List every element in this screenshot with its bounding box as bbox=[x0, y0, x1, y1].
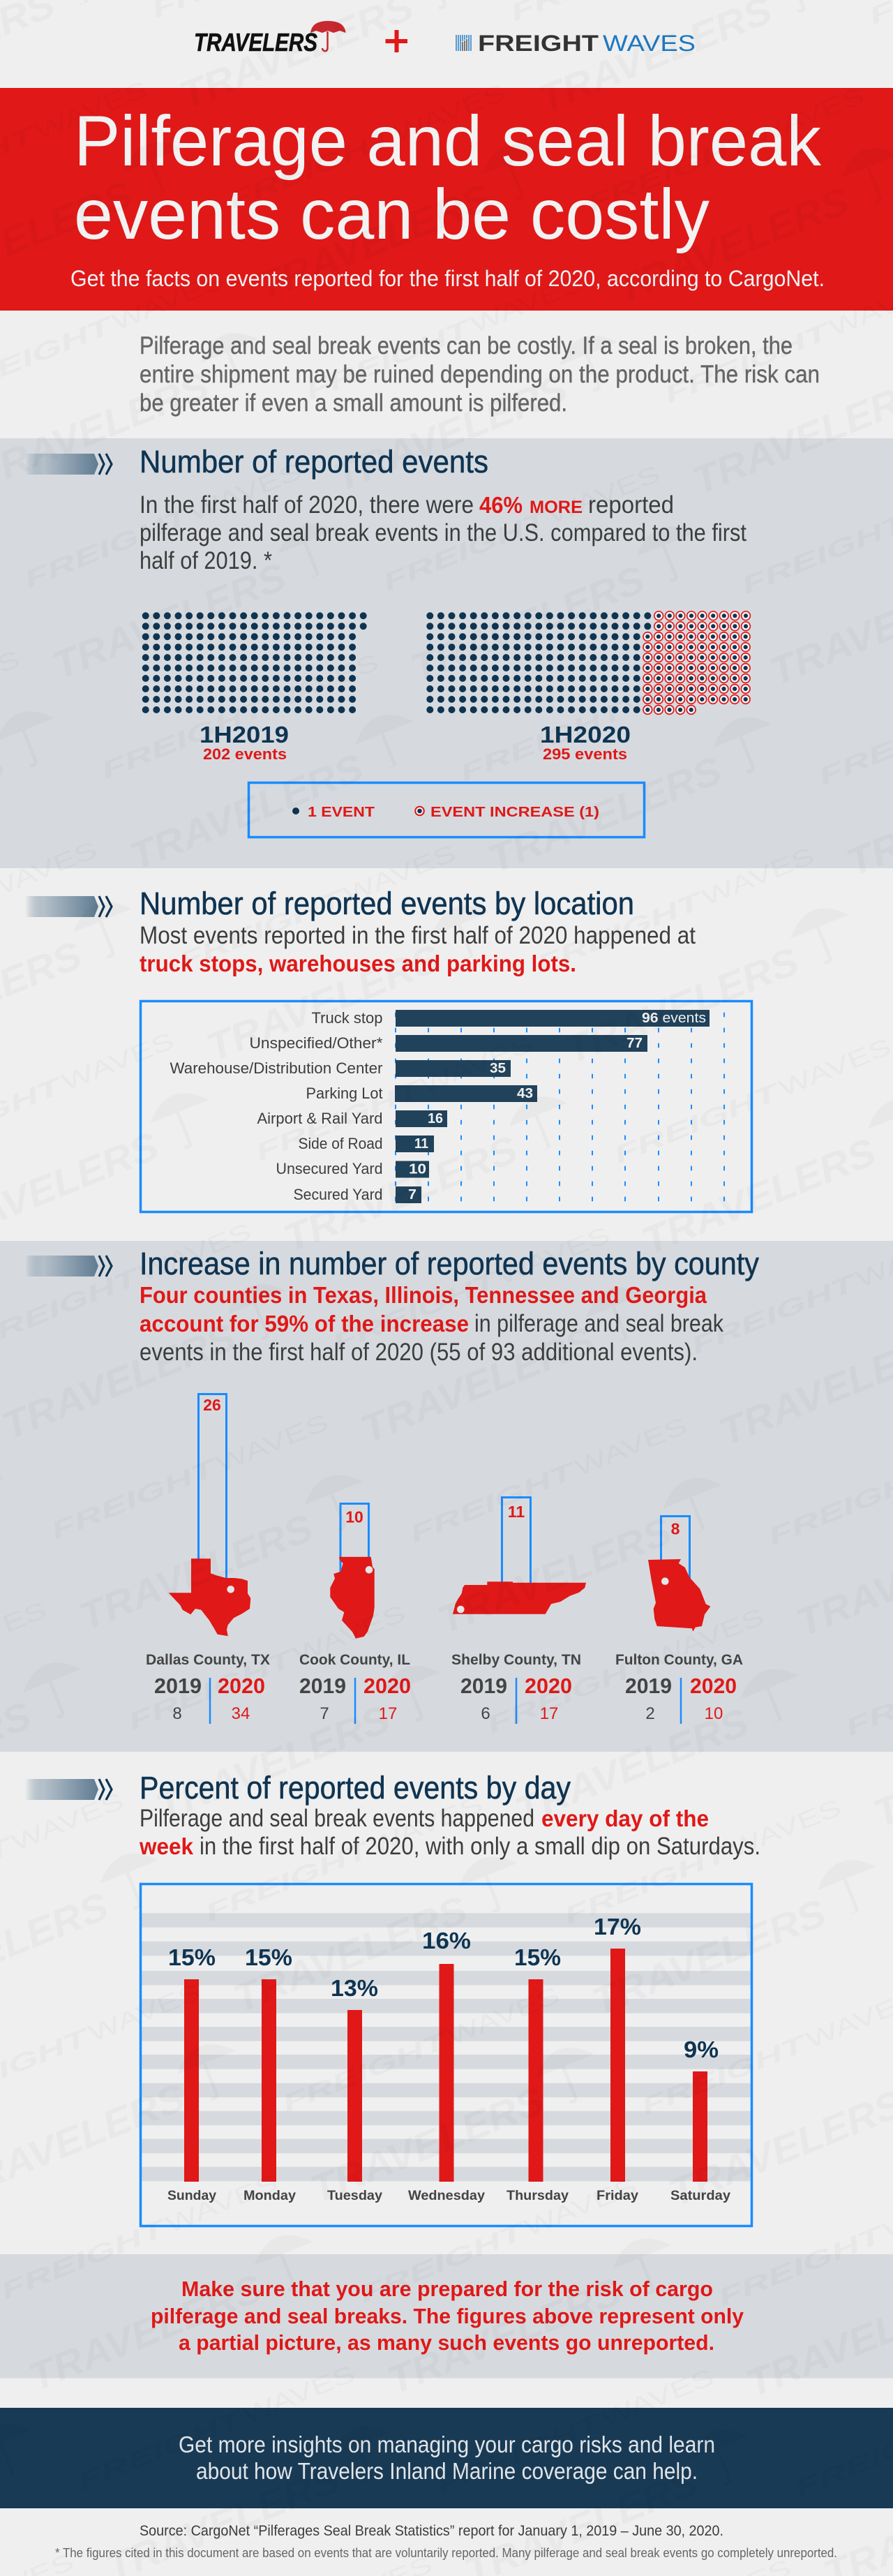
legend: 1 EVENT bbox=[308, 805, 375, 820]
county: Cook IL bbox=[299, 1503, 411, 1724]
bar: side of road: 11 bbox=[414, 1136, 428, 1152]
county: Shelby TN: 11 bbox=[508, 1503, 525, 1521]
county: Shelby TN: 17 bbox=[540, 1704, 558, 1723]
bar: truck stop: Truck stop bbox=[311, 1009, 382, 1027]
bar: Monday: Monday bbox=[243, 2189, 296, 2203]
body text: In the first half of 2020, there were bbox=[140, 491, 474, 519]
legend: EVENT INCREASE (1) bbox=[430, 805, 599, 820]
intro text: be greater if even a small amount is pilfered. bbox=[140, 389, 567, 417]
body text bbox=[140, 491, 746, 574]
county: Dallas TX: 26 bbox=[203, 1396, 221, 1414]
body text: in the first half of 2020, with only a small dip on Saturdays. bbox=[200, 1833, 760, 1860]
county: Fulton GA: Fulton County, GA bbox=[615, 1652, 743, 1668]
body text: pilferage and seal break events in the U.S. compared to the first bbox=[140, 519, 746, 546]
bar chart: location bbox=[141, 1001, 752, 1212]
body text: every day of the bbox=[541, 1806, 709, 1831]
bar: airport bbox=[257, 1110, 447, 1127]
bar: Friday bbox=[594, 1914, 641, 2203]
map: Texas bbox=[169, 1558, 250, 1636]
county: Dallas TX: 8 bbox=[172, 1704, 182, 1723]
title: events can be costly bbox=[74, 174, 710, 254]
bar: Thursday: 15% bbox=[514, 1944, 561, 1970]
bar: warehouse bbox=[170, 1059, 511, 1077]
county: Fulton GA: 2 bbox=[645, 1704, 655, 1723]
bar: Tuesday bbox=[327, 1975, 382, 2203]
bar: unspecified bbox=[250, 1034, 647, 1052]
callout: prepared for risk: Make sure that you are prepared for the risk of cargo bbox=[181, 2277, 713, 2301]
county: Shelby TN: 2019 bbox=[460, 1674, 507, 1698]
bar: side of road: Side of Road bbox=[299, 1135, 382, 1152]
plus sign bbox=[385, 30, 407, 52]
logo: FreightWaves: WAVES bbox=[603, 31, 696, 56]
county: Cook IL: 10 bbox=[345, 1507, 363, 1526]
bar: Sunday: Sunday bbox=[167, 2189, 216, 2203]
county: Fulton GA: 8 bbox=[671, 1520, 680, 1538]
body text: account for 59% of the increase bbox=[140, 1311, 469, 1337]
body text: Four counties in Texas, Illinois, Tennessee and Georgia bbox=[140, 1282, 707, 1308]
bar: Tuesday: 13% bbox=[331, 1975, 378, 2001]
panel: events by location bbox=[25, 886, 752, 1212]
body text: truck stops, warehouses and parking lots. bbox=[140, 951, 576, 976]
body text bbox=[140, 922, 696, 976]
county: Shelby TN bbox=[451, 1498, 586, 1724]
label: 1H2020: 1H2020 bbox=[540, 722, 631, 747]
map: Illinois bbox=[330, 1557, 375, 1639]
county: Cook IL: 17 bbox=[379, 1704, 397, 1723]
county: Fulton GA: 10 bbox=[705, 1704, 723, 1723]
bar: secured yard: Secured Yard bbox=[293, 1186, 382, 1203]
body text: Most events reported in the first half of 2020 happened at bbox=[140, 922, 696, 949]
bar: truck stop bbox=[311, 1009, 710, 1027]
body text: reported bbox=[588, 491, 674, 519]
title banner bbox=[0, 88, 893, 311]
county: Shelby TN: Shelby County, TN bbox=[451, 1652, 581, 1668]
callout: prepared for risk bbox=[0, 2254, 893, 2378]
county: Shelby TN: 6 bbox=[481, 1704, 490, 1723]
bar: airport: 16 bbox=[428, 1111, 443, 1126]
panel: increase by county bbox=[0, 1241, 893, 1752]
bar: parking lot: 43 bbox=[517, 1086, 533, 1101]
call to action band: about how Travelers Inland Marine coverage can help. bbox=[196, 2458, 698, 2484]
county: Dallas TX: 34 bbox=[232, 1704, 250, 1723]
bar: Friday: Friday bbox=[596, 2189, 638, 2203]
bar: Saturday: Saturday bbox=[670, 2189, 730, 2203]
source line: Source: CargoNet “Pilferages Seal Break Statistics” report for January 1, 2019 – June 30, 2020. bbox=[140, 2523, 723, 2539]
county: Shelby TN: 2020 bbox=[525, 1674, 572, 1698]
county: Fulton GA: 2020 bbox=[690, 1674, 737, 1698]
county: Cook IL: Cook County, IL bbox=[299, 1652, 410, 1668]
logo: FreightWaves bbox=[456, 31, 696, 56]
bar: side of road bbox=[299, 1135, 434, 1152]
county: Fulton GA bbox=[615, 1516, 743, 1724]
bar: Wednesday: Wednesday bbox=[408, 2189, 485, 2203]
label: 295 events: 295 events bbox=[543, 745, 627, 763]
dot chart: 1H2019 bbox=[146, 616, 363, 763]
bar: Saturday bbox=[670, 2037, 730, 2203]
bar chart: by day bbox=[140, 1884, 753, 2226]
callout: prepared for risk: a partial picture, as many such events go unreported. bbox=[179, 2330, 714, 2355]
bar: secured yard: 7 bbox=[408, 1187, 417, 1203]
body text: 46% bbox=[479, 492, 523, 518]
bar: Saturday: 9% bbox=[684, 2037, 719, 2062]
county: Cook IL: 7 bbox=[320, 1704, 329, 1723]
subtitle: Get the facts on events reported for the first half of 2020, according to CargoNet. bbox=[70, 266, 825, 291]
call to action band bbox=[0, 2408, 893, 2508]
bar: Thursday: Thursday bbox=[506, 2189, 569, 2203]
bar: Tuesday: Tuesday bbox=[327, 2189, 382, 2203]
logo: FreightWaves: FREIGHT bbox=[478, 31, 599, 56]
heading: Percent of reported events by day bbox=[140, 1770, 571, 1806]
bar: Sunday bbox=[167, 1944, 216, 2203]
intro text: entire shipment may be ruined depending on the product. The risk can bbox=[140, 361, 820, 388]
bar: parking lot bbox=[306, 1085, 537, 1102]
bar: truck stop: 96 events bbox=[642, 1011, 706, 1026]
body text bbox=[140, 1282, 723, 1366]
map: Tennessee bbox=[453, 1581, 586, 1614]
intro text: Pilferage and seal break events can be costly. If a seal is broken, the bbox=[140, 332, 793, 359]
heading: Number of reported events by location bbox=[140, 886, 634, 921]
county: Cook IL: 2019 bbox=[299, 1674, 346, 1698]
body text: half of 2019. * bbox=[140, 547, 272, 574]
title: Pilferage and seal break bbox=[74, 101, 822, 181]
body text: events in the first half of 2020 (55 of 93 additional events). bbox=[140, 1339, 698, 1366]
body text: in pilferage and seal break bbox=[474, 1310, 723, 1337]
bar: Monday bbox=[243, 1944, 296, 2203]
intro text bbox=[140, 332, 820, 417]
bar: unsecured yard: Unsecured Yard bbox=[276, 1160, 382, 1177]
bar: Wednesday bbox=[408, 1928, 485, 2203]
county: Dallas TX bbox=[146, 1394, 270, 1724]
title bbox=[74, 101, 822, 254]
bar: Thursday bbox=[506, 1944, 569, 2203]
bar: Sunday: 15% bbox=[168, 1944, 216, 1970]
panel: number of reported events bbox=[0, 438, 893, 868]
body text bbox=[139, 1805, 760, 1860]
panel: percent by day bbox=[25, 1770, 760, 2226]
bar: parking lot: Parking Lot bbox=[306, 1085, 382, 1102]
bar: unsecured yard: 10 bbox=[409, 1161, 426, 1177]
bar: unspecified: 77 bbox=[626, 1036, 643, 1051]
arrow bbox=[25, 1779, 112, 1800]
callout: prepared for risk: pilferage and seal breaks. The figures above represent only bbox=[151, 2304, 744, 2328]
arrow bbox=[25, 1256, 112, 1276]
call to action band: Get more insights on managing your cargo risks and learn bbox=[179, 2432, 715, 2457]
dot chart: 1H2020 bbox=[430, 616, 746, 763]
body text: Pilferage and seal break events happened bbox=[140, 1805, 534, 1832]
legend bbox=[248, 783, 645, 837]
footnote: * The figures cited in this document are based on events that are voluntarily reported. Many pilferage and seal break events go completely unreported. bbox=[55, 2546, 837, 2560]
bar: Friday: 17% bbox=[594, 1914, 641, 1940]
logo: Travelers: TRAVELERS bbox=[194, 28, 317, 57]
bar: airport: Airport & Rail Yard bbox=[257, 1110, 382, 1127]
county: Dallas TX: 2019 bbox=[154, 1674, 202, 1698]
map: Georgia bbox=[648, 1559, 710, 1632]
label: 202 events: 202 events bbox=[203, 745, 287, 763]
county: Fulton GA: 2019 bbox=[625, 1674, 672, 1698]
body text: MORE bbox=[530, 498, 583, 517]
heading: Number of reported events bbox=[140, 444, 488, 479]
bar: warehouse: 35 bbox=[490, 1061, 506, 1076]
arrow bbox=[25, 896, 112, 917]
county: Cook IL: 2020 bbox=[363, 1674, 411, 1698]
county: Dallas TX: Dallas County, TX bbox=[146, 1652, 270, 1668]
bar: Monday: 15% bbox=[245, 1944, 292, 1970]
label: 1H2019: 1H2019 bbox=[200, 722, 289, 747]
bar: warehouse: Warehouse/Distribution Center bbox=[170, 1059, 382, 1077]
arrow bbox=[25, 454, 112, 475]
county: Dallas TX: 2020 bbox=[218, 1674, 265, 1698]
bar: unspecified: Unspecified/Other* bbox=[250, 1034, 383, 1052]
bar: Wednesday: 16% bbox=[422, 1928, 471, 1953]
logos header bbox=[194, 21, 696, 57]
heading: Increase in number of reported events by county bbox=[140, 1246, 759, 1281]
body text: week bbox=[139, 1833, 194, 1859]
